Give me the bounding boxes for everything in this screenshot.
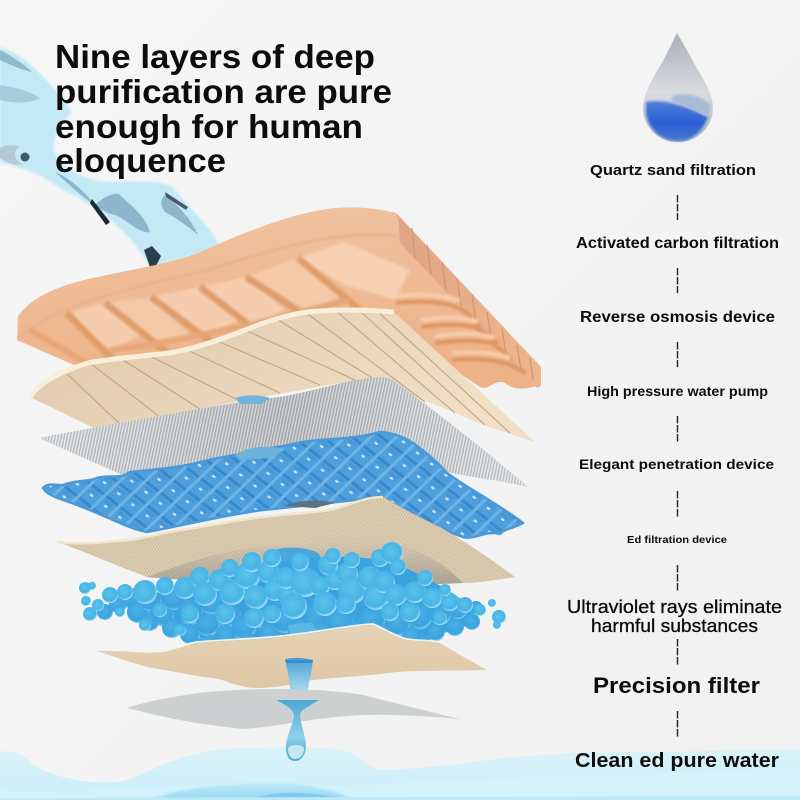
layer 3: plain beige sheet bbox=[97, 624, 487, 688]
filtration steps list bbox=[567, 162, 782, 772]
water stream pouring in bbox=[0, 47, 220, 267]
filtration steps list: Activated carbon filtration bbox=[576, 235, 779, 252]
front beads bbox=[79, 542, 506, 636]
title bbox=[55, 38, 392, 179]
layer 9: orange sponge bbox=[17, 207, 541, 389]
bottom water surface bbox=[0, 747, 800, 800]
dashed connectors bbox=[676, 195, 678, 738]
layer 5: beige fine-weave sheet bbox=[58, 497, 515, 590]
layer 8: striped beige board bbox=[30, 310, 535, 442]
filtration steps list: harmful substances bbox=[591, 616, 758, 636]
title: eloquence bbox=[55, 142, 226, 179]
filtration steps list: Clean ed pure water bbox=[575, 750, 779, 772]
layer 2: grey membrane bbox=[127, 689, 460, 729]
orange dimpled cells bbox=[18, 235, 526, 373]
back beads bbox=[97, 586, 483, 653]
layer 6: blue plastic net bbox=[43, 432, 523, 538]
icon: blue water drop bbox=[643, 33, 713, 142]
filtration steps list: Precision filter bbox=[593, 673, 760, 698]
filtration steps list: High pressure water pump bbox=[587, 384, 768, 399]
filtration steps list: Reverse osmosis device bbox=[580, 309, 775, 326]
layer 4: blue filter beads bbox=[79, 542, 506, 653]
filtration steps list: Ed filtration device bbox=[627, 534, 727, 546]
filtration steps list: Elegant penetration device bbox=[579, 456, 774, 472]
filtration steps list: Ultraviolet rays eliminate bbox=[567, 597, 782, 617]
title: Nine layers of deep bbox=[55, 38, 375, 75]
orange ribbed side edge bbox=[396, 213, 541, 388]
filtration steps list: Quartz sand filtration bbox=[590, 162, 756, 179]
falling water drop bbox=[277, 658, 319, 761]
title: enough for human bbox=[55, 108, 363, 145]
title: purification are pure bbox=[55, 73, 392, 110]
layer 7: grey mesh sheet bbox=[39, 377, 528, 487]
